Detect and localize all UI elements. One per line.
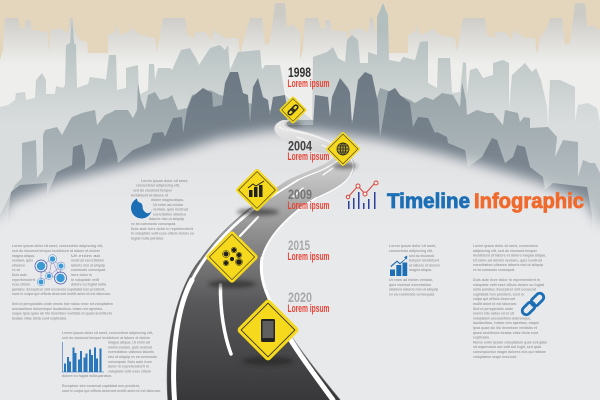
mid skyline [0, 3, 600, 300]
third skyline [0, 82, 600, 260]
text block: far right: voluptatem sequi nesciunt. [473, 355, 517, 359]
text block: far right: incididunt ut labore et dolore magna aliqua. [473, 254, 546, 258]
text block: top centre: dolore magna aliqua. [151, 198, 184, 202]
text block: top centre [131, 179, 195, 240]
text block: left: Sed ut perspiciatis unde omnis iste natus error sit voluptatem [12, 302, 114, 306]
right white edge line [261, 122, 353, 400]
text block: far right: voluptatem accusantium doloremque, [473, 316, 531, 320]
text block: bottom left: Lorem ipsum dolor sit amet, consectetur adipiscing elit, [62, 331, 153, 335]
left white edge line [174, 158, 340, 400]
text block: far right: Ut enim ad minim veniam, quis nostrud [473, 258, 543, 262]
text block: left: ex ea [12, 268, 21, 272]
text block: top centre: in voluptate velit esse cillum dolore eu [131, 232, 195, 236]
text block: far right: nulla pariatur. Excepteur sint occaecat [473, 288, 537, 292]
2004: Lorem ipsum [288, 151, 330, 163]
sign 2020: phone [236, 298, 300, 362]
text block: far right: sit aspernatur aut odit aut fugit, sed quia [473, 345, 542, 349]
bar chart [62, 342, 104, 372]
text block: bottom left: voluptate velit esse cillum [108, 369, 152, 373]
icon: chain link [521, 292, 545, 316]
fog ground [0, 130, 600, 400]
title [387, 190, 584, 213]
text block: right middle: quis nostrud exercitation [389, 283, 432, 287]
text block: left: Lorem ipsum dolor sit amet, consectetur adipiscing elit, [12, 244, 103, 248]
text block: top centre: consectetur adipiscing elit, [136, 184, 180, 188]
text block: left: laboris nisi ut aliquip [71, 263, 106, 267]
dark outer edges [167, 208, 340, 400]
2015: 2015 [288, 237, 310, 253]
text block: far right: quasi architecto beatae vitae dicta sunt [473, 331, 539, 335]
text block: left: nostrud exercitation [71, 259, 105, 263]
text block: bottom left: sed do eiusmod tempor incididunt ut labore et dolore [62, 336, 150, 340]
text block: right middle: ullamco laboris nisi ut aliquip [389, 288, 439, 292]
text block: left: dolore eu fugiat nulla [71, 283, 107, 287]
text block: far right: voluptate velit esse cillum dolore eu fugiat [473, 283, 545, 287]
text block: left: magna aliqua. [12, 254, 35, 258]
shadows under signs [208, 122, 357, 366]
text block: far right: Nemo enim ipsam voluptatem quia voluptas [473, 340, 547, 344]
text block: bottom left: consequat. Duis aute irure [108, 360, 152, 364]
text block: far right: Sed ut perspiciatis unde [473, 307, 513, 311]
sign 2015: network [205, 230, 259, 284]
text block: left: in voluptate velit [71, 278, 100, 282]
text block: far right: ipsa quae ab illo inventore veritatis et [473, 326, 538, 330]
timeline labels [288, 64, 330, 315]
text block: bottom left: minim veniam, quis nostrud [108, 345, 153, 349]
text block: top centre: incididunt ut labore et [131, 193, 169, 197]
2004: 2004 [288, 138, 312, 154]
text block: left: Duis aute [12, 273, 27, 277]
title icon: line chart [346, 181, 378, 209]
2009: 2009 [288, 186, 312, 202]
text block: left: reprehenderit [12, 278, 36, 282]
sign 1998: link [279, 96, 307, 124]
text block: bottom left: magna aliqua. Ut enim ad [108, 341, 151, 345]
2020 [288, 289, 330, 315]
road surface [167, 120, 355, 400]
text block: left: ullamco [12, 263, 26, 267]
text block: right middle [389, 244, 440, 296]
text block: left: irure dolor in [71, 273, 93, 277]
text block: top centre: veniam, quis nostrud [153, 208, 189, 212]
text block: left: sed do eiusmod tempor incididunt ut labore et dolore [12, 249, 100, 253]
text block: far right: exercitation ullamco laboris nisi ut aliquip [473, 263, 544, 267]
text block: bottom left: exercitation ullamco laboris [108, 350, 154, 354]
text block: top centre: Lorem ipsum dolor sit amet, [141, 179, 188, 183]
text block: far right: adipiscing elit, sed do eiusmod tempor [473, 249, 538, 253]
text block: far right: laudantium, totam rem aperiam, eaque [473, 321, 539, 325]
text block: right middle: Lorem ipsum dolor sit amet, [389, 244, 436, 248]
text block: left: sunt in culpa qui officia deserunt mollit anim id est laborum. [12, 292, 111, 296]
text block: left: commodo consequat. [71, 268, 106, 272]
text block: far right: culpa qui officia deserunt [473, 297, 516, 301]
2020: 2020 [288, 289, 312, 305]
text block: right middle: ut labore et dolore [409, 263, 440, 267]
text block: bottom left: Excepteur sint occaecat cupidatat non proident, [62, 384, 140, 388]
sky [0, 0, 600, 60]
text block: top centre: Duis aute irure dolor in reprehenderit [131, 227, 194, 231]
text block: far right [473, 244, 547, 359]
text block: left: veniam, quis [12, 259, 33, 263]
text block: far right: Duis aute irure dolor in reprehenderit in [473, 278, 541, 282]
text block: left: Ut enim ad [71, 254, 101, 258]
text block: top centre: sed do eiusmod tempor [133, 188, 173, 192]
2009: Lorem ipsum [288, 200, 330, 212]
text block: right middle: tempor incididunt [409, 259, 440, 263]
icon: growth bars [390, 256, 407, 276]
text block: top centre: fugiat nulla pariatur. [131, 236, 164, 240]
text block: bottom left: dolor in reprehenderit in [108, 365, 150, 369]
text block: right middle: ex ea commodo consequat. [389, 292, 435, 296]
text block: far right: Lorem ipsum dolor sit amet, consectetur [473, 244, 539, 248]
icon: pie chart [131, 198, 152, 218]
text block: left: accusantium doloremque laudantium, totam rem aperiam, [12, 307, 103, 311]
text block: right middle: consectetur adipiscing elit, [389, 249, 433, 253]
text block: top centre: laboris nisi ut aliquip [149, 217, 185, 221]
far skyline [0, 3, 600, 200]
text block: far right: consequuntur magni dolores eos qui ratione [473, 350, 546, 354]
road [167, 120, 355, 400]
text block: left: beatae vitae dicta sunt explicabo. [12, 316, 67, 320]
2009 [288, 186, 330, 212]
text block: top centre: exercitation ullamco [153, 212, 187, 216]
text block: left: esse cillum [12, 283, 31, 287]
text block: right middle: magna aliqua. [409, 268, 432, 272]
1998: Lorem ipsum [288, 78, 330, 90]
text block: far right: explicabo. [473, 336, 490, 340]
text block: far right: cupidatat non proident, sunt in [473, 292, 525, 296]
text block: far right: mollit anim id est laborum. [473, 302, 517, 306]
2004 [288, 138, 330, 163]
text block: far right: ex ea commodo consequat. [473, 268, 515, 272]
sign 2004: globe [325, 131, 361, 167]
text block: bottom left [62, 331, 161, 393]
2015 [288, 237, 330, 263]
text block: left: pariatur. Excepteur sint occaecat cupidatat non proident, [12, 287, 105, 291]
centre dashes [220, 127, 333, 354]
text block: bottom left: dolore eu fugiat nulla pariatur. [62, 374, 112, 378]
dark skyline [8, 72, 592, 240]
icon: people network [35, 255, 66, 286]
text block: right middle: Ut enim ad minim veniam, [389, 278, 433, 282]
1998 [288, 64, 330, 90]
text block: right middle: sed do eiusmod [409, 254, 435, 258]
title: Infographic [474, 190, 584, 213]
text block: bottom left: sunt in culpa qui officia deserunt mollit anim id est laborum. [62, 389, 161, 393]
text block: left [12, 244, 114, 320]
text block: bottom left: nisi ut aliquip ex ea commodo [108, 355, 158, 359]
1998: 1998 [288, 64, 311, 80]
2015: Lorem ipsum [288, 251, 330, 263]
2020: Lorem ipsum [288, 303, 330, 315]
text block: left: eaque ipsa quae ab illo inventore veritatis et quasi architecto [12, 312, 113, 316]
text block: top centre: Ut enim ad minim [153, 203, 184, 207]
text block: top centre: ex ea commodo consequat. [131, 222, 176, 226]
sign 2009: chart [235, 168, 279, 212]
text block: far right: omnis iste natus error sit [473, 312, 515, 316]
title: Timeline [387, 190, 470, 213]
